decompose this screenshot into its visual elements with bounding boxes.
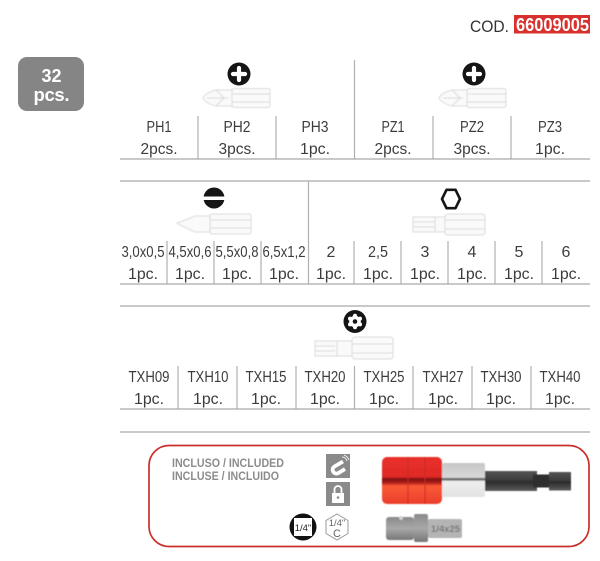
table: torx sizes: 1pc.: [251, 391, 281, 408]
table: torx sizes: TXH10: [188, 369, 229, 386]
table: phillips sizes: 3pcs.: [218, 141, 256, 158]
icon: slotted bit: [177, 214, 251, 234]
panel: slotted bits: [122, 188, 306, 284]
icon: quarter inch square drive: 1/4": [295, 523, 311, 534]
piece count badge: [18, 57, 84, 111]
piece count badge: 32: [42, 65, 62, 86]
table: torx sizes: 1pc.: [369, 391, 399, 408]
icon: magnet: [326, 454, 350, 478]
product code: 66009005: [516, 14, 589, 35]
table: hex sizes: 6: [562, 244, 571, 261]
table: slotted sizes: 6,5x1,2: [262, 244, 306, 261]
table: slotted sizes: 1pc.: [128, 266, 158, 283]
table: hex sizes: 1pc.: [457, 266, 487, 283]
table: pozidriv sizes: PZ1: [382, 119, 405, 136]
table: hex sizes: 1pc.: [363, 266, 393, 283]
table: hex sizes: 3: [421, 244, 430, 261]
icon: hex recess: [442, 190, 460, 208]
table: torx sizes: 1pc.: [428, 391, 458, 408]
table: hex sizes: [316, 241, 581, 284]
icon: quarter inch hex: [326, 514, 348, 540]
table: torx sizes: [128, 366, 581, 409]
table: slotted sizes: 5,5x0,8: [216, 244, 259, 261]
icon: hex bit: [413, 214, 485, 235]
table: phillips sizes: PH1: [146, 119, 172, 136]
table: slotted sizes: [122, 241, 306, 284]
panel: included accessories: [149, 446, 589, 546]
table: phillips sizes: 1pc.: [300, 141, 330, 158]
heading: included: [172, 458, 284, 483]
table: phillips sizes: PH3: [302, 119, 329, 136]
table: torx sizes: 1pc.: [310, 391, 340, 408]
table: hex sizes: 1pc.: [504, 266, 534, 283]
product code: COD.: [470, 18, 509, 36]
icon: quarter inch hex: C: [333, 528, 341, 540]
table: torx sizes: TXH25: [364, 369, 405, 386]
panel: phillips bits: [140, 62, 330, 159]
icon: lock: [326, 482, 350, 506]
panel: torx bits: [128, 310, 581, 409]
table: torx sizes: TXH20: [304, 369, 346, 386]
icon: phillips recess: [228, 62, 250, 86]
table: phillips sizes: PH2: [224, 119, 251, 136]
piece count badge: pcs.: [34, 84, 70, 105]
table: hex sizes: 1pc.: [551, 266, 581, 283]
table: phillips sizes: 2pcs.: [140, 141, 178, 158]
table: hex sizes: 4: [468, 244, 477, 261]
panel: hex bits: [316, 190, 581, 284]
table: hex sizes: 1pc.: [316, 266, 346, 283]
table: torx sizes: TXH30: [480, 369, 522, 386]
table: torx sizes: 1pc.: [193, 391, 223, 408]
product code: [470, 14, 590, 36]
table: pozidriv sizes: 3pcs.: [454, 141, 490, 158]
icon: pozidriv recess: [462, 62, 486, 86]
icon: slotted recess: [202, 188, 226, 208]
table: pozidriv sizes: 2pcs.: [374, 141, 412, 158]
table: slotted sizes: 4,5x0,6: [168, 244, 212, 261]
table: torx sizes: 1pc.: [486, 391, 516, 408]
table: slotted sizes: 1pc.: [222, 266, 252, 283]
table: torx sizes: TXH09: [128, 369, 170, 386]
table: pozidriv sizes: PZ2: [460, 119, 484, 136]
icon: torx recess: [344, 310, 366, 333]
icon: torx bit: [315, 337, 393, 359]
table: hex sizes: 2,5: [368, 244, 388, 261]
panel: pozidriv bits: [374, 62, 565, 159]
image: socket adapter: 1/4x25: [431, 524, 460, 534]
icon: phillips bit: [203, 88, 270, 108]
table: pozidriv sizes: [374, 116, 565, 159]
table: pozidriv sizes: 1pc.: [535, 141, 565, 158]
table: slotted sizes: 3,0x0,5: [122, 244, 165, 261]
table: torx sizes: 1pc.: [134, 391, 164, 408]
image: socket adapter: [386, 514, 462, 542]
icon: quarter inch square drive: [290, 514, 316, 540]
table: torx sizes: TXH27: [422, 369, 464, 386]
icon: quarter inch hex: 1/4": [329, 518, 345, 529]
table: torx sizes: TXH15: [246, 369, 287, 386]
table: hex sizes: 5: [515, 244, 524, 261]
heading: included: INCLUSE / INCLUIDO: [172, 471, 279, 483]
table: slotted sizes: 1pc.: [175, 266, 205, 283]
image: magnetic bit holder: [382, 457, 571, 504]
table: pozidriv sizes: PZ3: [538, 119, 562, 136]
table: slotted sizes: 1pc.: [269, 266, 299, 283]
table: phillips sizes: [140, 116, 330, 159]
heading: included: INCLUSO / INCLUDED: [172, 458, 284, 470]
icon: pozidriv bit: [439, 88, 506, 108]
table: hex sizes: 1pc.: [410, 266, 440, 283]
table: torx sizes: TXH40: [540, 369, 581, 386]
table: hex sizes: 2: [327, 244, 336, 261]
table: torx sizes: 1pc.: [545, 391, 575, 408]
